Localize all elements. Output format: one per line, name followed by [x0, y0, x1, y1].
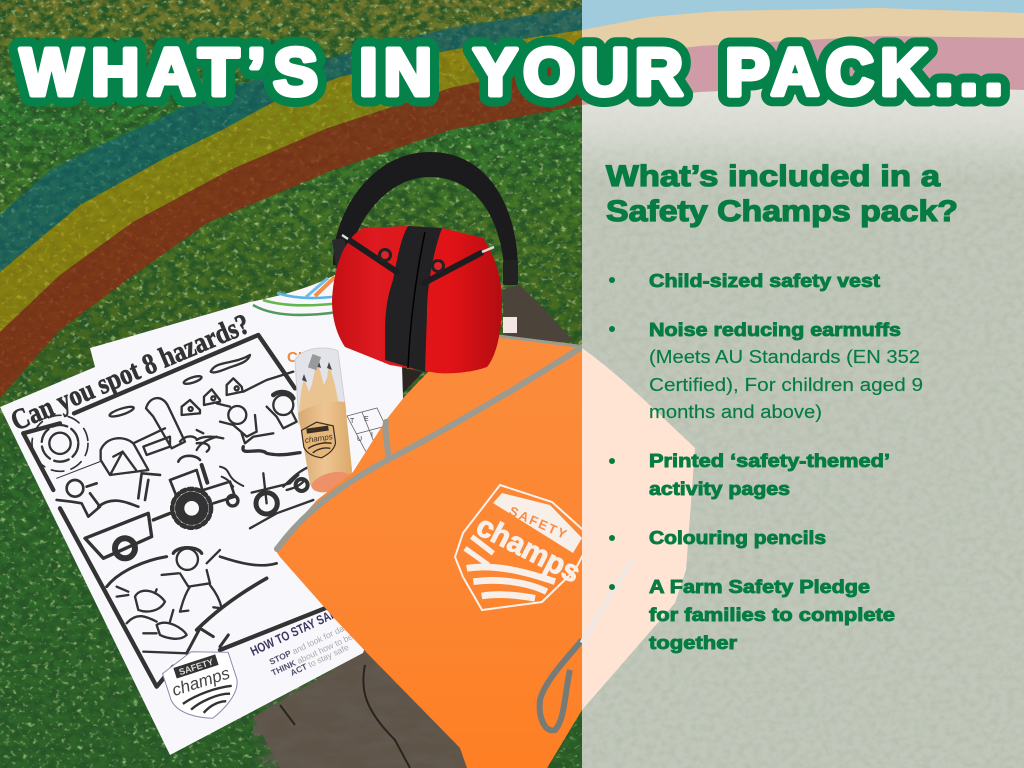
item: activity pages: [609, 451, 890, 499]
frame lines: [23, 335, 333, 687]
activity safety tip text: ACT to stay safe: [289, 642, 350, 678]
item: earmuffs: Noise reducing earmuffs: [649, 320, 901, 340]
activity safety tip text: [248, 603, 371, 678]
item: activity pages: Printed ‘safety-themed’: [649, 451, 890, 471]
item: farm safety pledge: for families to complete: [649, 605, 895, 625]
word grid puzzle: I: [371, 432, 373, 439]
activity pages: [0, 275, 420, 755]
rainbow over grass: [0, 7, 582, 398]
side arms: [346, 238, 481, 283]
title green outline: IN: [359, 35, 432, 110]
item: earmuffs: months and above): [649, 402, 822, 422]
red earmuffs: [332, 152, 518, 373]
title green outline: YOUR: [473, 35, 683, 110]
item: farm safety pledge: A Farm Safety Pledge: [649, 577, 870, 597]
tube logo: champs: [304, 432, 333, 445]
vest logo: SAFETY: [507, 503, 571, 543]
grass photo background: [0, 0, 582, 768]
word grid puzzle: [347, 408, 398, 470]
vest body: [274, 335, 582, 768]
headband: [333, 152, 518, 270]
pencils in clear case: [295, 348, 346, 424]
cartoon: cows: [117, 587, 187, 653]
cartoon: farmer with trailer: [57, 473, 160, 558]
activity safety tip text: HOW TO STAY SAFE: [248, 603, 345, 659]
title white letters: YOUR: [473, 35, 683, 110]
title white letters: WHAT’S: [20, 35, 318, 110]
right semi-transparent panel: [582, 0, 1024, 768]
vest seen through panel: [582, 348, 695, 710]
item: activity pages: activity pages: [649, 479, 790, 499]
cartoon: sun and clouds: [32, 355, 250, 471]
colouring pencils tube: [295, 348, 353, 496]
safety champs logo on sheet: SAFETY: [178, 657, 215, 677]
cartoon: houses barn silo: [101, 372, 293, 475]
item: farm safety pledge: [609, 577, 895, 653]
rainbow on activity sheet: [253, 277, 340, 315]
cups: [332, 226, 502, 373]
cartoon: child on bicycle: [252, 465, 313, 514]
orange safety vest: [274, 335, 592, 768]
tree stump: [253, 285, 574, 768]
activity safety tip text: THINK about how to be safe: [270, 623, 371, 678]
item: farm safety pledge: together: [649, 633, 737, 653]
wood tube: [298, 401, 352, 493]
panel heading: Safety Champs pack?: [606, 195, 958, 228]
title: [20, 35, 1003, 110]
word grid puzzle: E: [364, 416, 369, 423]
tube salmon end cap: [309, 468, 353, 496]
title green outline: [20, 35, 1003, 110]
drawstring loop: [540, 640, 582, 730]
panel rainbow bands: [582, 0, 1024, 105]
safety champs logo on sheet: champs: [170, 663, 233, 700]
title white letters: [20, 35, 1003, 110]
heading: can you spot 8 hazards: Can you spot 8 hazards?: [6, 308, 254, 437]
item: earmuffs: (Meets AU Standards (EN 352: [649, 347, 920, 367]
word grid puzzle: U: [357, 436, 362, 443]
panel heading: What’s included in a: [606, 160, 940, 193]
title white letters: IN: [359, 35, 432, 110]
item: earmuffs: Certified), For children aged 9: [649, 375, 923, 395]
item: earmuffs: [609, 320, 923, 422]
safety champs logo on sheet: [159, 641, 246, 729]
title green outline: WHAT’S: [20, 35, 318, 110]
reflective trim: [277, 335, 582, 549]
label tag: [503, 317, 517, 333]
panel heading: [606, 160, 958, 228]
item: pencils: Colouring pencils: [649, 528, 826, 548]
list of pack contents: [609, 271, 923, 653]
title white letters: PACK...: [725, 35, 1003, 110]
white paper sheets: [0, 275, 420, 755]
vest logo: champs: [471, 509, 586, 590]
word grid puzzle: T: [350, 418, 355, 425]
tube logo: [301, 420, 337, 460]
vest logo: [455, 485, 592, 610]
activity safety tip text: STOP and look for danger: [268, 616, 361, 667]
activity heading orange: CH: [287, 349, 309, 366]
cartoon: tractor: [153, 456, 243, 528]
cartoon: children splashing in mud: [197, 392, 300, 455]
item: safety vest: Child-sized safety vest: [649, 271, 880, 291]
title green outline: PACK...: [725, 35, 1003, 110]
black centre band: [385, 226, 442, 372]
colouring page illustration: [23, 335, 333, 687]
cartoon: running child: [162, 548, 222, 612]
